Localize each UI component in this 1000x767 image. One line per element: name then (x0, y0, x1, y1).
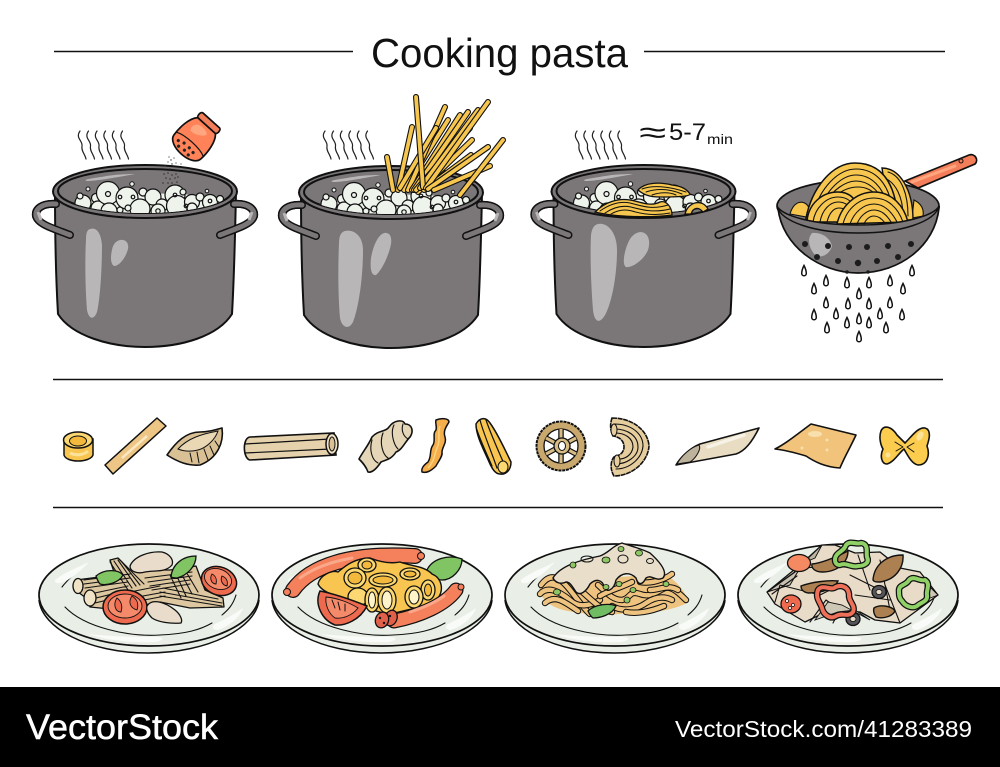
chicken (147, 602, 182, 623)
pasta pile (73, 558, 224, 610)
pasta: rigatoni tube (244, 433, 338, 460)
spaghetti (387, 97, 503, 195)
pasta: ring (64, 432, 93, 461)
colander front (777, 206, 939, 274)
pasta: spiral tube (476, 419, 511, 474)
timing label: ≈ (639, 115, 666, 150)
salt grains (162, 156, 182, 184)
step 1: boiling pot with salt (36, 108, 254, 347)
dish 3: noodles with cream sauce (505, 543, 725, 653)
pot (282, 166, 500, 348)
pasta: wheel rotelle (536, 422, 586, 470)
plate (505, 544, 725, 653)
pasta: curly strip (422, 419, 449, 472)
mushrooms (801, 551, 903, 618)
sausage (284, 552, 424, 596)
salt shaker (167, 108, 225, 166)
cooking pasta (595, 183, 708, 217)
cream sauce (553, 543, 665, 594)
steam (78, 131, 128, 159)
footer bar (0, 687, 1000, 767)
peas (554, 582, 669, 603)
red pepper (817, 586, 854, 617)
pot (534, 165, 753, 347)
pasta: penne (676, 428, 759, 465)
pasta: farfalle bow (880, 427, 929, 465)
pasta: lasagna sheet (775, 424, 856, 468)
green pepper top (835, 543, 868, 566)
step 2: adding spaghetti (282, 97, 503, 348)
title: Cooking pasta (371, 30, 628, 76)
timing label: 5-7 (669, 119, 706, 146)
steam (575, 131, 626, 159)
tomato (103, 590, 147, 624)
dish 4: penne salad with peppers and olives (738, 543, 958, 653)
pasta: fusilli (359, 421, 412, 472)
footer image id: VectorStock.com/41283389 (675, 716, 972, 742)
rigatoni pile (318, 558, 441, 614)
basil (588, 604, 616, 618)
basil (171, 556, 196, 578)
plate (272, 544, 492, 653)
pasta: conchiglie shell (167, 428, 222, 465)
pasta shapes row (64, 418, 929, 476)
colander handle (905, 155, 977, 188)
basil (96, 571, 123, 585)
footer logo: VectorStock (26, 707, 218, 747)
tomato (197, 562, 241, 600)
plate (39, 544, 259, 653)
tomato wedge (318, 591, 367, 625)
plate (738, 544, 958, 653)
penne pile (767, 545, 938, 623)
spaghetti in colander (790, 163, 923, 224)
step 4: colander draining (777, 155, 977, 342)
sausage (373, 584, 464, 630)
small tomato (781, 595, 801, 613)
tomato slice (788, 554, 810, 572)
steam (323, 131, 374, 159)
chicken (130, 552, 173, 573)
water drops (802, 266, 914, 342)
timing label: min (707, 131, 733, 147)
olives (846, 586, 886, 626)
timing label (639, 115, 733, 150)
green pepper right (899, 578, 928, 607)
step 3: boiling pasta 5-7 min (534, 115, 753, 347)
pasta: half moon ridged (611, 418, 649, 476)
colander bowl back (777, 180, 939, 232)
dish 1: rigatoni with tomato and chicken (39, 544, 259, 653)
basil (427, 557, 462, 580)
dish 2: rigatoni with sausage and tomato (272, 544, 492, 653)
pot (36, 165, 254, 347)
noodles (539, 574, 687, 615)
pasta: straight stick (105, 418, 166, 474)
